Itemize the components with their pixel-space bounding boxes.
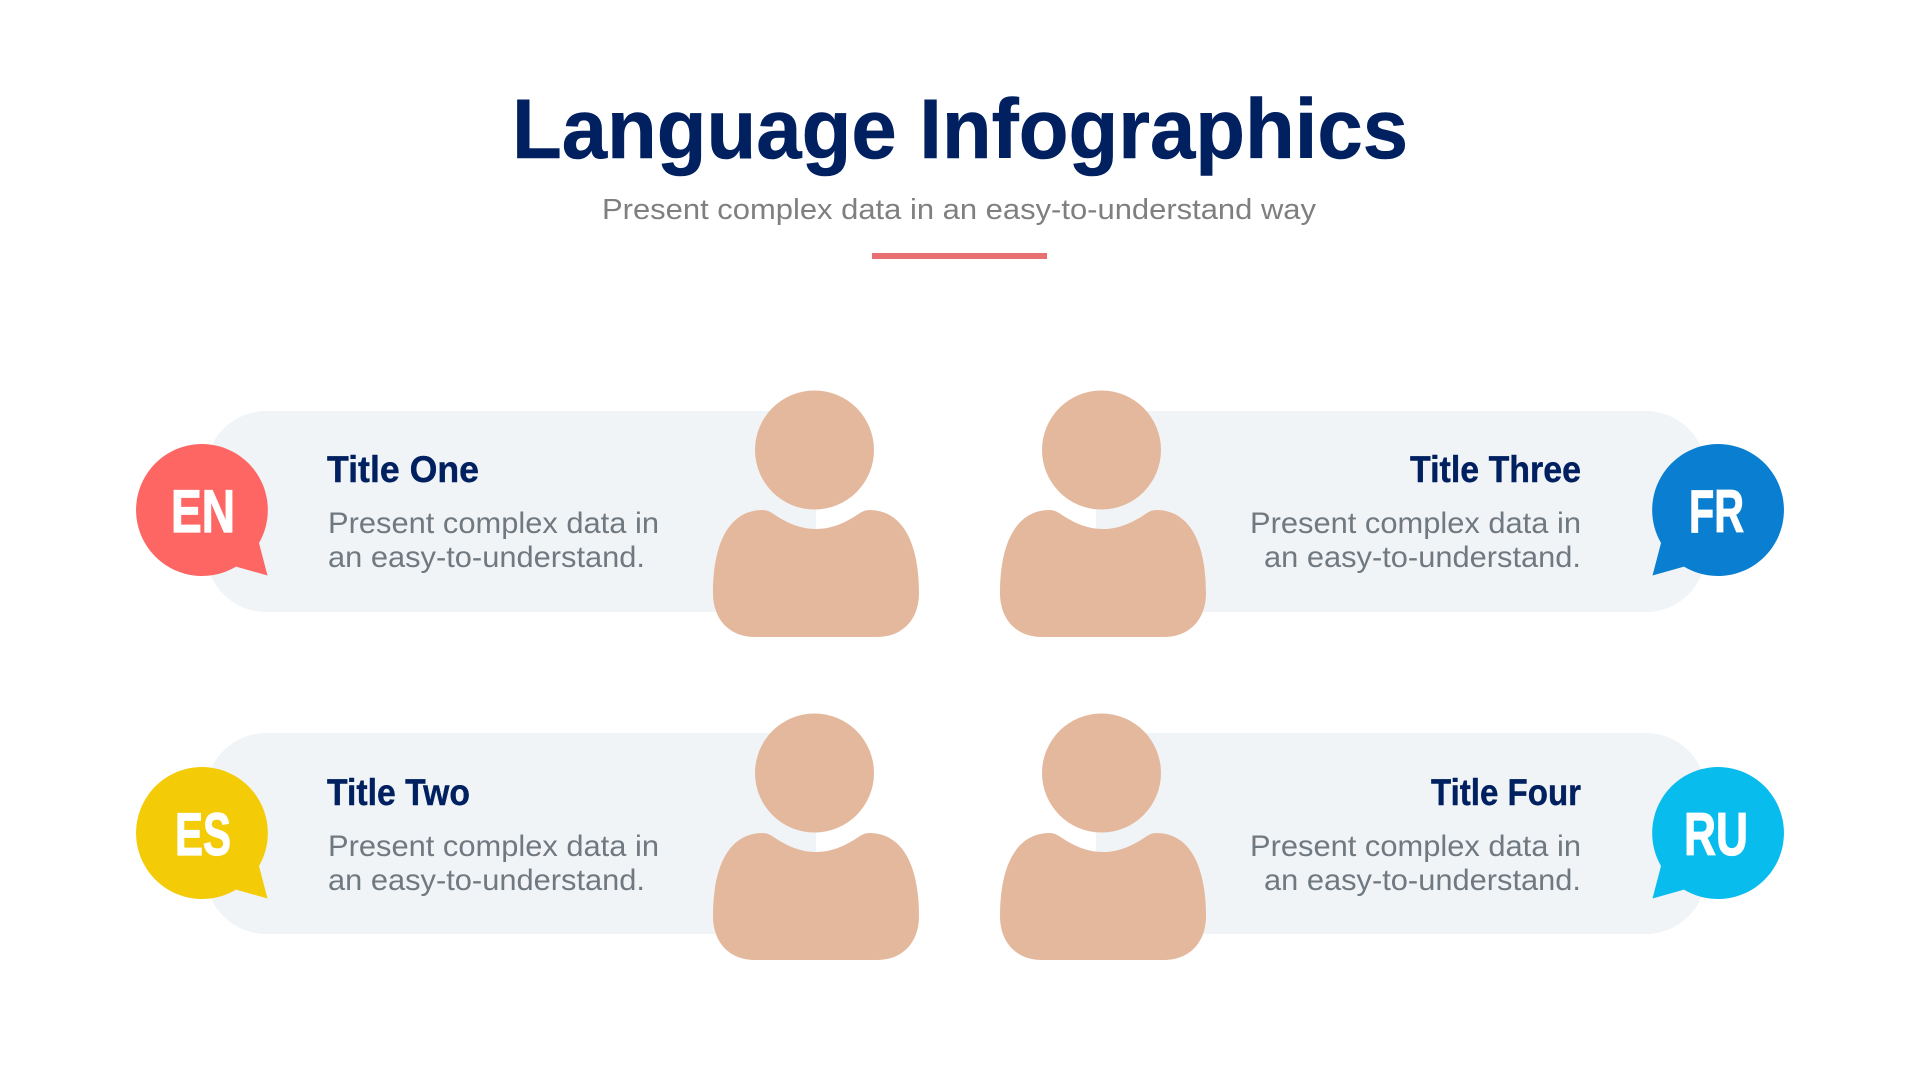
text block: Present complex data in — [328, 830, 659, 863]
text block — [1250, 830, 1581, 897]
icon: EN speech bubble: EN — [171, 478, 235, 545]
heading: Title One: Title One — [327, 449, 479, 490]
panel: Title One — [136, 390, 919, 637]
text block: Present complex data in — [1250, 507, 1581, 540]
icon: FR speech bubble — [1652, 444, 1784, 576]
header — [512, 82, 1408, 259]
subtitle: Present complex data in an easy-to-understand way — [602, 194, 1317, 226]
icon: person — [713, 390, 919, 637]
icon: person — [1000, 390, 1206, 637]
text block — [328, 507, 659, 574]
title: Language Infographics — [512, 82, 1408, 176]
panel background — [1096, 411, 1706, 612]
heading: Title Three: Title Three — [1410, 449, 1581, 490]
accent underline — [872, 253, 1047, 259]
text block: an easy-to-understand. — [328, 541, 645, 574]
text block: an easy-to-understand. — [1264, 541, 1581, 574]
heading: Title Four: Title Four — [1431, 772, 1581, 813]
panel background — [206, 733, 816, 934]
icon: ES speech bubble: ES — [175, 801, 231, 868]
panel background — [206, 411, 816, 612]
panel: Title Two — [136, 714, 919, 960]
text block: Present complex data in — [328, 507, 659, 540]
icon: ES speech bubble — [136, 767, 268, 899]
icon: FR speech bubble: FR — [1689, 478, 1744, 545]
text block — [328, 830, 659, 897]
icon: person — [1000, 714, 1206, 960]
text block: an easy-to-understand. — [1264, 864, 1581, 897]
icon: RU speech bubble: RU — [1684, 801, 1748, 868]
text block — [1250, 507, 1581, 574]
panel background — [1096, 733, 1706, 934]
text block: an easy-to-understand. — [328, 864, 645, 897]
text block: Present complex data in — [1250, 830, 1581, 863]
icon: RU speech bubble — [1652, 767, 1784, 899]
heading: Title Two: Title Two — [327, 772, 470, 813]
panel: Title Four — [1000, 714, 1784, 960]
panel: Title Three — [1000, 390, 1784, 637]
icon: person — [713, 714, 919, 960]
icon: EN speech bubble — [136, 444, 268, 576]
